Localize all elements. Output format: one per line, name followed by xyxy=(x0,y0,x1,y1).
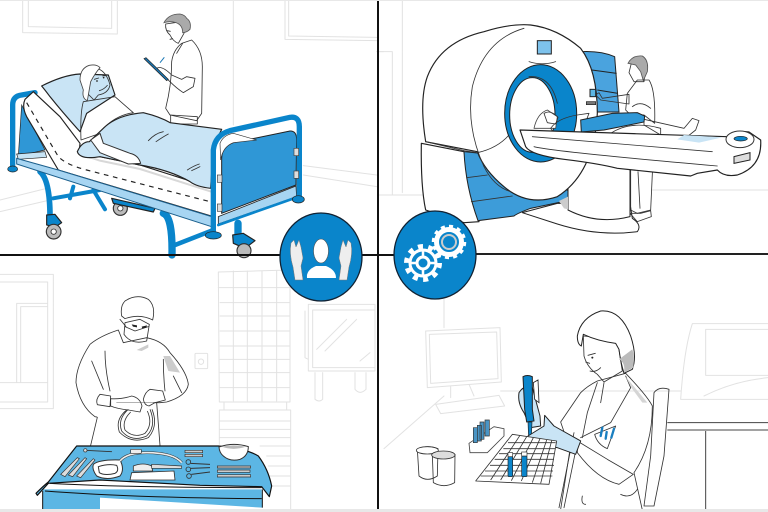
specimen jars xyxy=(416,447,455,486)
surgical instruments xyxy=(61,444,251,480)
bed frame rail xyxy=(17,158,212,227)
instrument table with blue drape xyxy=(36,446,272,510)
pipette and hand xyxy=(519,375,541,456)
headboard xyxy=(8,93,47,172)
pillow xyxy=(42,74,115,132)
gloved hand xyxy=(527,415,581,454)
patient xyxy=(80,65,133,140)
mattress xyxy=(24,92,213,217)
small vial tray xyxy=(469,420,504,453)
footboard xyxy=(205,117,304,239)
surgeon xyxy=(76,297,188,445)
scanner base xyxy=(421,143,571,223)
patient on table xyxy=(534,110,699,139)
bed undercarriage xyxy=(40,172,255,258)
counter xyxy=(667,423,768,510)
blanket xyxy=(77,113,222,188)
scanner rear panel xyxy=(581,52,619,112)
scanner table xyxy=(520,130,761,176)
room background xyxy=(0,270,375,512)
panel: laboratory scene xyxy=(384,299,768,510)
lab technician xyxy=(559,311,652,510)
chair xyxy=(644,388,669,506)
nurse xyxy=(144,14,202,124)
panel: surgeon scene xyxy=(0,270,375,512)
room background xyxy=(0,0,383,212)
panel: hospital bed scene xyxy=(0,0,383,258)
room background xyxy=(377,0,768,195)
room background xyxy=(384,299,768,449)
scanner gantry xyxy=(423,25,597,200)
scanner pedestal and foot xyxy=(522,157,639,233)
icon: person with protecting hands xyxy=(280,213,362,301)
technician xyxy=(596,56,655,222)
panel: CT scanner scene xyxy=(377,0,768,233)
test tube rack with blue tubes xyxy=(476,434,557,484)
icon: gears xyxy=(394,211,476,299)
